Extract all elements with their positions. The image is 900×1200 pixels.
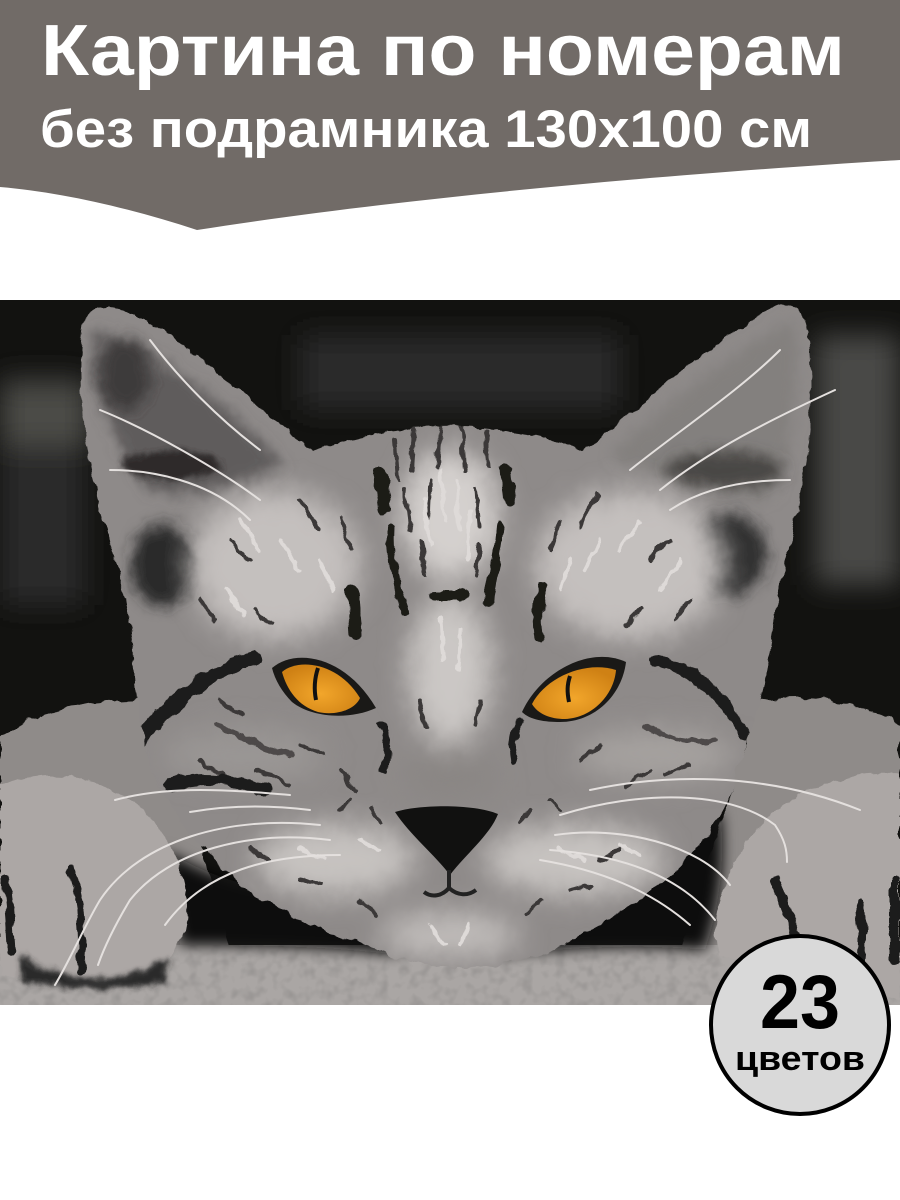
floor bbox=[0, 945, 900, 1005]
header banner bbox=[0, 0, 900, 230]
cat painting bbox=[0, 290, 900, 1005]
title: Картина по номерам bbox=[41, 11, 845, 91]
dark fur strokes bbox=[200, 425, 690, 915]
nose bbox=[395, 806, 498, 895]
right paw bbox=[716, 774, 900, 1000]
left paw bbox=[0, 775, 187, 988]
shadow under chin bbox=[165, 810, 722, 955]
subtitle: без подрамника 130х100 см bbox=[40, 100, 812, 159]
background patches bbox=[0, 335, 900, 605]
light fur strokes bbox=[225, 470, 680, 945]
light fur regions bbox=[165, 450, 735, 959]
badge caption: цветов bbox=[735, 1040, 865, 1078]
badge: 23 colours bbox=[711, 936, 889, 1114]
right ear shading bbox=[620, 330, 794, 498]
forehead stripes bbox=[352, 470, 543, 638]
ear spots bbox=[131, 523, 195, 607]
left eye bbox=[272, 658, 376, 716]
badge number: 23 bbox=[760, 960, 840, 1045]
right eye bbox=[522, 657, 626, 722]
whiskers bbox=[55, 340, 860, 985]
lower body fur bbox=[0, 696, 900, 945]
head bbox=[80, 304, 812, 969]
cheek stripes bbox=[135, 658, 745, 790]
left ear shading bbox=[92, 330, 285, 494]
